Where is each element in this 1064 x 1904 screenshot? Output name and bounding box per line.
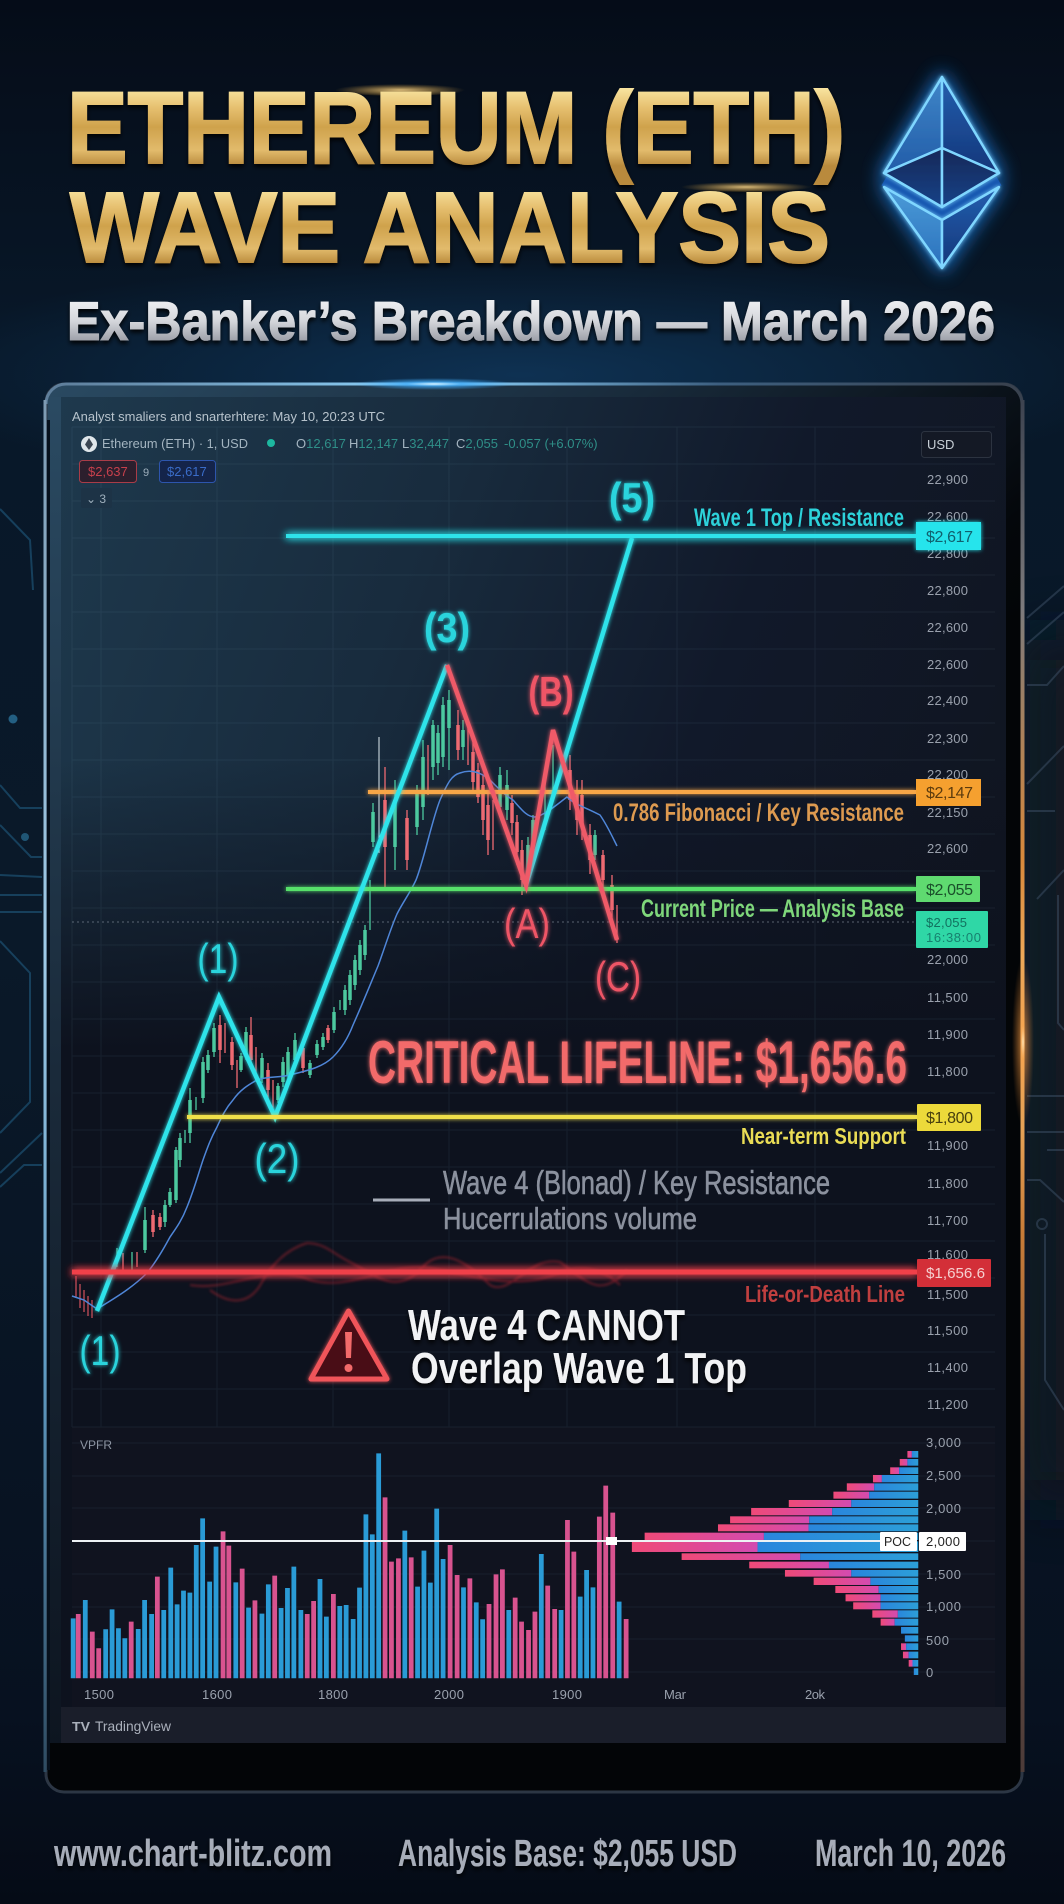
level: life-or-death line: Life-or-Death Line: [745, 1281, 905, 1307]
price axis labels: 22,600: [927, 509, 968, 524]
volume axis labels: 1,000: [926, 1599, 961, 1614]
level: near-term support: $1,800: [926, 1110, 973, 1127]
ohlc values: 32,447: [409, 436, 449, 451]
moving average line: [72, 771, 617, 1309]
level: current price: [72, 876, 988, 948]
time axis labels: 2000: [434, 1687, 464, 1702]
level: life-or-death line: [72, 1259, 991, 1307]
impulse wave lines: [97, 538, 632, 1311]
level: current price: $2,055: [926, 882, 973, 899]
wave labels: (1): [198, 935, 238, 982]
wave labels: (C): [595, 953, 641, 1000]
corrective wave lines: [447, 665, 617, 940]
collapse control: [81, 488, 112, 508]
price axis labels: 22,400: [927, 693, 968, 708]
level: fibonacci resistance: [368, 779, 981, 827]
icon: warning triangle: [311, 1311, 387, 1379]
subtitle: Ex-Banker’s Breakdown — March 2026: [67, 290, 995, 352]
time axis labels: 1800: [318, 1687, 348, 1702]
currency box: USD: [927, 437, 954, 452]
label: VPFR: VPFR: [80, 1438, 112, 1452]
level: current price: $2,055: [926, 915, 967, 930]
point of control line: POC: [884, 1535, 911, 1549]
wave labels: (3): [424, 604, 470, 651]
level: fibonacci resistance: $2,147: [926, 785, 973, 802]
chart header: [72, 410, 992, 508]
ohlc values: H: [349, 436, 358, 451]
wave labels: (A): [504, 900, 550, 947]
ohlc values: -0.057 (+6.07%): [504, 436, 598, 451]
legend: wave 4 key resistance: Hucerrulations volume: [443, 1201, 697, 1236]
warning text: Overlap Wave 1 Top: [411, 1344, 747, 1393]
warning text: [408, 1301, 747, 1393]
red badge: [80, 460, 136, 482]
symbol name: Ethereum (ETH) · 1, USD: [102, 436, 248, 451]
warning text: Wave 4 CANNOT: [408, 1301, 685, 1350]
volume bars: [73, 1453, 626, 1678]
wave labels: [80, 474, 655, 1374]
level: near-term support: [187, 1104, 981, 1149]
title: [67, 71, 845, 284]
price axis labels: 22,300: [927, 731, 968, 746]
price axis labels: 11,900: [927, 1027, 968, 1042]
volume axis labels: 500: [926, 1633, 949, 1648]
wave labels: (B): [528, 668, 574, 715]
level: wave 1 top resistance: $2,617: [926, 529, 973, 546]
red badge: $2,637: [88, 464, 128, 479]
wave labels: (2): [254, 1135, 300, 1182]
price axis labels: 11,800: [927, 1176, 968, 1191]
footer: www.chart-blitz.com: [53, 1833, 332, 1875]
red turbulence around lifeline: [190, 1243, 627, 1300]
time axis labels: Mar: [664, 1687, 687, 1702]
separator digit: 9: [143, 467, 149, 479]
price axis labels: 11,800: [927, 1064, 968, 1079]
analyst note: Analyst smaliers and snarterhtere: May 10, 20:23 UTC: [72, 410, 385, 424]
price axis labels: 11,500: [927, 990, 968, 1005]
volume axis labels: 2,500: [926, 1468, 961, 1483]
ohlc values: L: [402, 436, 409, 451]
time axis labels: [84, 1687, 826, 1702]
price axis labels: 22,800: [927, 583, 968, 598]
title: ETHEREUM (ETH): [67, 71, 845, 185]
title: WAVE ANALYSIS: [70, 172, 830, 284]
time axis labels: 1900: [552, 1687, 582, 1702]
footer: [53, 1833, 1006, 1875]
time axis labels: 2ok: [805, 1687, 826, 1702]
tradingview logo: TradingView: [95, 1718, 172, 1734]
volume axis labels: [926, 1435, 961, 1680]
price axis labels: 22,200: [927, 767, 968, 782]
ohlc values: 2,055: [465, 436, 498, 451]
status dot: [267, 439, 275, 447]
level: wave 1 top resistance: Wave 1 Top / Resistance: [694, 504, 904, 532]
legend: wave 4 key resistance: [373, 1164, 830, 1236]
level: current price: Current Price — Analysis Base: [641, 895, 904, 923]
wave labels: (1): [80, 1327, 120, 1374]
price axis labels: 11,500: [927, 1287, 968, 1302]
level: wave 1 top resistance: [286, 504, 981, 550]
candlesticks: [76, 690, 617, 1318]
level: current price: 16:38:00: [926, 930, 981, 945]
ohlc values: O: [296, 436, 306, 451]
price axis labels: 22,800: [927, 546, 968, 561]
price axis labels: 11,500: [927, 1323, 968, 1338]
price axis labels: 22,000: [927, 952, 968, 967]
footer: Analysis Base: $2,055 USD: [398, 1833, 737, 1875]
ohlc values: 12,617: [306, 436, 346, 451]
currency box: [922, 432, 992, 458]
price axis labels: 22,150: [927, 805, 968, 820]
icon: ethereum coin: [81, 436, 97, 452]
price axis labels: 22,600: [927, 657, 968, 672]
price axis labels: 22,900: [927, 472, 968, 487]
panel: volume chart: [72, 1435, 995, 1734]
volume axis labels: 3,000: [926, 1435, 961, 1450]
ohlc values: 12,147: [358, 436, 398, 451]
price axis labels: 22,600: [927, 841, 968, 856]
level: fibonacci resistance: 0.786 Fibonacci / Key Resistance: [613, 799, 904, 827]
icon: ethereum logo: [884, 77, 999, 268]
point of control line: [72, 1532, 966, 1551]
wave labels: (5): [609, 474, 655, 521]
level: near-term support: Near-term Support: [741, 1123, 906, 1149]
price axis labels: 11,400: [927, 1360, 968, 1375]
blue badge: $2,617: [167, 464, 207, 479]
price axis labels: 11,600: [927, 1247, 968, 1262]
volume axis labels: 1,500: [926, 1567, 961, 1582]
volume axis labels: 0: [926, 1665, 933, 1680]
volume axis labels: 2,000: [926, 1501, 961, 1516]
point of control line: 2,000: [926, 1534, 960, 1549]
tradingview logo: TV: [72, 1719, 90, 1734]
price axis labels: 11,700: [927, 1213, 968, 1228]
time axis labels: 1600: [202, 1687, 232, 1702]
panel: chart frame: [45, 378, 1034, 1792]
level: life-or-death line: $1,656.6: [926, 1265, 985, 1282]
time axis labels: 1500: [84, 1687, 114, 1702]
ohlc values: C: [456, 436, 465, 451]
price axis labels: [927, 472, 968, 1412]
price axis labels: 11,900: [927, 1138, 968, 1153]
price axis labels: 11,200: [927, 1397, 968, 1412]
collapse control: ⌄ 3: [86, 492, 106, 506]
price axis labels: 22,600: [927, 620, 968, 635]
volume profile: [632, 1451, 918, 1675]
blue badge: [160, 460, 216, 482]
legend: wave 4 key resistance: Wave 4 (Blonad) / Key Resistance: [443, 1164, 830, 1201]
